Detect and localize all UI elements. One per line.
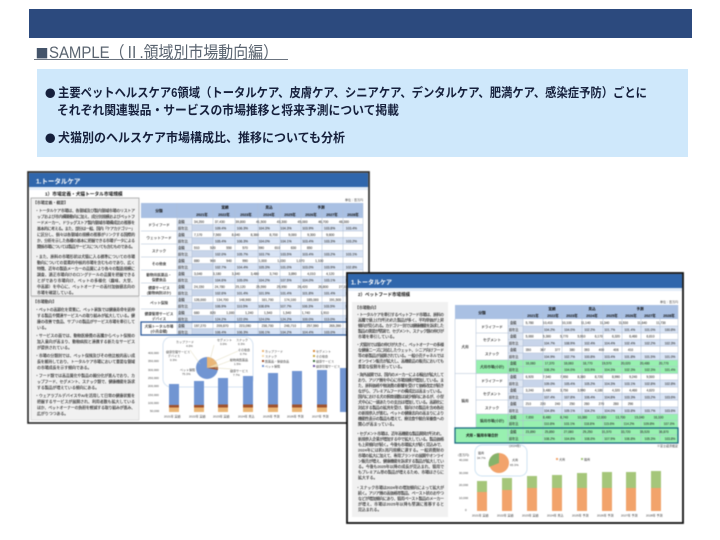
values: 金額: [178, 219, 185, 224]
text box: market trends: ン販売が増え、健康機能を訴求する製品が拡大してい: [358, 458, 444, 464]
values: 124.2% 122.0% 124.0% 124.2% 100.0% 113.0% 109.8%: [215, 318, 357, 322]
legend: スナック: [265, 354, 277, 358]
text box: market trends: 長を維持しており、トータルケア市場において重要な領域: [37, 359, 135, 364]
category labels: セグメント: [483, 337, 501, 342]
pie labels: 3.0%: [220, 342, 227, 346]
x axis labels: 2026年 予測: [287, 414, 304, 418]
pie chart: 65.3%: [510, 463, 519, 467]
pie callout: [163, 337, 253, 387]
pie chart: 猫用: [478, 450, 484, 455]
values: 前年比: [509, 354, 519, 359]
table headers: 2023年: [240, 212, 252, 217]
text box: market trends: ・トータルケアを牽引するペットフード市場は、原料の: [356, 312, 444, 317]
legend: 医薬品・保健食品: [265, 358, 289, 364]
unit note: 単位：百万円: [660, 299, 678, 304]
y axis labels: 0: [465, 508, 467, 512]
legend: その他食: [316, 354, 328, 358]
page header: [348, 274, 682, 291]
text box: market trends: [352, 302, 448, 517]
text box: market definition: ・また、原料の市場形状は犬猫に入る標準についての市場: [35, 254, 135, 259]
y axis labels: [458, 453, 469, 512]
text box: market definition: 動向についての要素的中核的市場を含むものであり、広く: [37, 260, 135, 265]
text box: market trends: オンライン販売が拡大し、高機能品の販売においても: [358, 358, 444, 364]
pie labels: 健康管理サービス: [166, 349, 190, 354]
x axis labels: 2021年 実績: [472, 512, 489, 518]
table headers: 2025年: [606, 313, 618, 318]
pie chart: (2024年): [509, 443, 521, 448]
values: 金額: [178, 245, 185, 250]
table headers: 2027年: [644, 313, 656, 318]
x axis labels: [164, 414, 329, 418]
chart: dog and cat stacked bars: [458, 443, 663, 518]
pie labels: 75.3%: [182, 372, 191, 376]
text box: market trends: 【市場動向】: [355, 305, 378, 310]
values: 前年比: [178, 238, 189, 244]
table headers: 分類: [478, 310, 486, 315]
values: 金額 350 367 377 380 393 400 406 410: [510, 347, 633, 352]
bullet: healthcare domains: ●: [45, 86, 56, 101]
legend: 犬用: [559, 456, 565, 462]
x axis labels: 2028年 予測: [646, 512, 663, 518]
bullet: healthcare domains: 犬猫別のヘルスケア市場構成比、推移についても分析: [58, 130, 345, 145]
section title: SAMPLE（Ⅱ.領域別市場動向編）: [49, 43, 278, 62]
values: 金額 210 220 240 250 260 270 280 290: [510, 401, 633, 406]
text box: market trends: 重要な役割を担っている。: [358, 364, 404, 369]
text box: market trends: ップフード、セグメント、スナック類で、健康機能を訴求: [37, 379, 135, 384]
legend: 健康サービス: [316, 358, 334, 364]
table headers: 予測: [317, 204, 325, 210]
y axis labels: 300,000: [148, 368, 159, 372]
values: 102.7% 104.4% 105.3% 101.0% 103.0% 103.9% 102.8%: [215, 266, 357, 270]
category labels: デバイス: [152, 316, 167, 321]
table headers: 2024年: [263, 212, 275, 217]
values: 前年比: [178, 316, 189, 322]
page header: 1.トータルケア: [351, 278, 392, 286]
text box: market trends: 市場の拡大に加えて、専用ブランドの展開やオンライ: [358, 453, 444, 458]
pie labels: 健康サービス: [230, 368, 248, 373]
text box: market trends: 製品の需要が堅調で、セグメント、スナック類の伸びが: [358, 328, 444, 334]
values: 104.2% 104.0% 102.2% 101.7% 101.4% 101.0% 100.8%: [544, 328, 676, 332]
header bar: [29, 9, 692, 38]
pie chart: [190, 345, 238, 379]
page subtitle: 2）ペットフード市場規模: [358, 291, 411, 298]
text box: market trends: 把握するサービスが展開され、利用者数も拡大している: [37, 399, 135, 404]
pie labels: セグメント: [217, 337, 232, 342]
x axis labels: 2025年 予測: [263, 414, 280, 418]
values: 前年比: [178, 278, 189, 282]
table headers: 実績: [548, 306, 556, 311]
y axis labels: 350,000: [148, 359, 159, 363]
pie labels: 0.7%: [240, 352, 247, 356]
x axis labels: 2023年 実績: [213, 414, 230, 418]
table headers: 2026年: [305, 212, 317, 217]
panel: sample page 1 total care market: [28, 172, 369, 423]
values: 前年比: [509, 394, 519, 400]
values: 金額: [178, 258, 185, 263]
bullet: healthcare domains: それぞれ関連製品・サービスの市場推移と将来予測について掲載: [57, 102, 399, 118]
text box: market definition: か、分析を示した各種の基本に把握できる市場データによる: [37, 238, 135, 243]
values: 金額 6,920 7,540 7,950 8,360 8,720 8,990 9,240 9,500: [510, 374, 655, 379]
text box: market trends: 加入意向が高まり、動物病院と連携する新たなサービス: [37, 339, 135, 344]
table headers: 2022年: [547, 313, 559, 318]
pie labels: 0.3%: [238, 342, 245, 346]
highlight: total row: [141, 322, 369, 335]
bars: [477, 471, 661, 511]
y axis labels: 150,000: [148, 393, 159, 397]
values: 34,200 37,430 39,800 41,500 43,300 45,000 46,700 48,300: [194, 220, 349, 224]
table headers: 2021年: [196, 212, 208, 217]
text box: market trends: ・ウェアラブルデバイスやAIを活用して日常の健康状態を: [35, 393, 135, 398]
category labels: (動物病院ほか): [147, 290, 171, 295]
x axis labels: 2026年 予測: [597, 512, 614, 518]
table headers: [478, 306, 675, 318]
text box: market trends: ・犬猫別では猫の伸びが大きく、ペットオーナーの多様: [356, 342, 444, 347]
legend: 猫用: [584, 456, 590, 462]
pie labels: 4.0%: [186, 344, 193, 348]
text box: market trends: などが増加傾向にあり、猫用ペースト製品のメーカー: [358, 496, 444, 501]
category labels: 猫用: [461, 398, 469, 403]
text box: market trends: 機能性表示の製品も増えて、療法食や総合栄養食への: [358, 416, 444, 421]
text box: market definition: ップおよび市内構築動向に加え、成分別規模およびペットフ: [37, 214, 135, 219]
values: 金額: [178, 310, 185, 315]
values: 前年比: [509, 367, 519, 372]
bullet: healthcare domains: [45, 85, 647, 146]
values: 金額 3,240 3,480 3,750 3,990 4,180 4,320 4,460 4,620: [510, 388, 655, 392]
category labels: スナック: [485, 405, 500, 410]
pie labels: スナック: [236, 337, 248, 342]
values: 金額: [178, 297, 185, 302]
values: 金額 7,650 8,480 8,740 10,380 12,000 13,700 15,040 16,100: [510, 414, 664, 420]
table headers: 2021年: [527, 313, 539, 318]
category labels: ドライフード: [481, 324, 503, 329]
text box: market definition: [31, 198, 139, 296]
bars: [169, 368, 350, 412]
text box: market trends: 新規参入企業が増加する中で拡大している。製品価格: [358, 436, 444, 442]
values: 金額: [178, 284, 185, 289]
text box: market definition: 【市場定義・概要】: [33, 200, 68, 205]
pie labels: デバイス: [168, 353, 180, 358]
table headers: 実績: [221, 204, 229, 210]
values: 102.0% 105.7% 103.7% 103.5% 103.4% 103.2% 103.1%: [215, 252, 357, 256]
values: 前年比: [509, 340, 519, 346]
x axis labels: 2022年 実績: [497, 512, 514, 518]
text box: market definition: 特徴、近年の製造メーカーの品質により各々の製造規模に: [37, 266, 135, 271]
category labels: 動物用医薬品・: [146, 272, 172, 277]
values: 104.6% 105.0% 104.2% 107.5% 104.0% 103.1% 102.7%: [215, 278, 357, 282]
category labels: 保健食品: [152, 277, 167, 282]
values: 104.8% 109.1% 104.2% 104.0% 103.8% 103.7% 103.6%: [544, 409, 676, 413]
values: 106.4% 106.3% 106.1% 104.2% 104.4% 103.0% 103.2%: [215, 330, 357, 334]
pie labels: 動物用医薬品: [230, 357, 248, 362]
category labels: ドライフード: [148, 222, 170, 227]
text box: market trends: [31, 297, 139, 420]
table headers: 2027年: [326, 212, 338, 217]
pie labels: 0.3%: [170, 358, 177, 362]
text box: market trends: の市場成長を示す傾向である。: [37, 365, 91, 370]
legend: [262, 348, 340, 368]
text box: market trends: する製品が増えている傾向にある。: [37, 385, 99, 390]
text box: market trends: な健康ニーズに対応したウェット、シニア向けフード: [358, 348, 444, 352]
text box: market definition: とがであり市場向け、ペットの多様化（趣味、大型、: [37, 278, 135, 283]
page header: 1.トータルケア: [36, 176, 81, 186]
category labels: ウェットフード: [146, 235, 172, 240]
table headers: 2023年: [566, 313, 578, 318]
values: 金額: [178, 323, 185, 328]
x axis labels: 2024年 見込: [547, 512, 564, 518]
text box: market trends: 傾向が見られる。カテゴリー別では健康機能を訴求した: [358, 323, 444, 328]
text box: market trends: ・セグメント市場は、近年高機能な製品開発が行われ、: [356, 431, 444, 436]
text box: market definition: 中高齢）を中心に、ペットオーナーの高付加価値志向の: [37, 284, 135, 289]
values: 前年比: [178, 264, 189, 270]
market size table: [141, 197, 369, 335]
unit note: 単位：百万円: [345, 197, 363, 202]
pie labels: その他食: [238, 347, 250, 352]
category labels: 犬用: [461, 344, 469, 349]
text box: market definition: に区分し、個々は各領域の規模の推移がリンクする国際的: [37, 232, 135, 237]
values: 197,270 209,870 223,090 236,700 246,710 257,590 265,390 273,980: [194, 324, 364, 328]
pie chart: 犬用: [512, 457, 518, 462]
values: 前年比: [509, 408, 519, 413]
text box: market trends: ・市場の分類別では、ペット保険及びその他比較的高い成: [35, 353, 135, 358]
pie labels: ペット保険: [180, 367, 195, 372]
text box: market trends: ・ペットの高齢化を背景に、ペット家族では健康寿命を延伸: [35, 307, 135, 312]
text box: market trends: いる。: [37, 325, 49, 330]
text box: market trends: る。今後も2025年以降の成長が見込まれ、猫用で: [358, 464, 444, 469]
table headers: 2028年: [663, 313, 675, 318]
values: 前年比: [178, 304, 189, 308]
values: 106.9% 110.5% 108.6% 107.7% 106.3% 103.5% 102.9%: [215, 304, 357, 308]
values: 108.2% 104.0% 103.9% 104.3% 102.3% 102.3% 101.4%: [544, 368, 676, 372]
legend: [556, 456, 590, 462]
category labels: スナック: [152, 248, 167, 253]
text box: market definition: 基本的に考える。また、部分は一般、国内「ケアカテゴリー」: [37, 226, 135, 231]
text box: market trends: もプレミアム帯の製品が増えるため、市場はさらに: [358, 470, 444, 474]
table headers: [155, 204, 359, 217]
text box: market definition: ・トータルケア市場は、各領域及び製内領域市場のリストア: [35, 208, 135, 213]
values: 前年比: [178, 252, 189, 256]
x axis labels: 2027年 予測: [312, 414, 329, 418]
category labels: セグメント: [483, 391, 501, 396]
category labels: 健康管理サービス: [145, 311, 174, 316]
values: 金額 16,060 17,370 18,060 18,770 19,570 20,020 20,480 20,770: [510, 360, 669, 366]
text box: market trends: おり、アジア圏を中心に市場規模が増加している。ま: [358, 378, 444, 382]
text box: market trends: 康の改善で食品、サプリの製品がサービス市場を牽引して: [37, 319, 135, 324]
values: 3,040 3,180 3,340 3,480 3,740 3,890 4,010 4,120: [194, 272, 334, 276]
values: 109.4% 106.3% 104.3% 104.3% 103.9% 103.8% 103.4%: [215, 226, 357, 230]
text box: market trends: た、原料価格や物流費の影響を受けて価格改定が続き: [358, 383, 444, 388]
pie callout: [475, 445, 527, 476]
table headers: 2026年: [625, 313, 637, 318]
values: 510 520 550 570 590 610 630 650: [194, 246, 312, 250]
text box: market trends: ・スナック市場は2024年の増加傾向によって拡大が: [356, 485, 444, 490]
category labels: [145, 222, 174, 334]
values: 前年比: [509, 436, 519, 441]
y axis labels: 50,000: [150, 409, 160, 413]
category labels: 犬猫トータル市場: [145, 324, 174, 328]
category labels: 猫用市場(小計): [480, 418, 504, 423]
values: 126,000 134,700 148,900 161,700 174,100 185,000 191,500 197,000: [194, 298, 364, 302]
text box: market trends: 関心が高まっている。: [358, 422, 397, 426]
text box: market trends: 高騰で値上げが行われた製品が多く、平均単価が上昇: [358, 318, 444, 322]
bullet: healthcare domains: ●: [45, 131, 56, 146]
text box: market trends: 見込まれる。: [358, 507, 381, 512]
page subtitle: 1）市場定義・犬猫トータル市場規模: [45, 190, 123, 198]
text box: market trends: の新規参入が進む。ペットの健康志向の高まりにより: [358, 410, 444, 416]
category labels: その他食: [152, 261, 167, 266]
x axis labels: 2022年 実績: [189, 414, 206, 418]
values: 104.7% 108.9% 102.4% 104.4% 102.4% 102.2% 102.3%: [544, 342, 676, 346]
values: 金額 5,060 5,300 5,770 5,910 6,170 6,320 6,460 6,610: [510, 334, 655, 338]
y axis labels: 400,000: [148, 351, 159, 355]
values: 110.8% 103.1% 118.8% 115.6% 114.2% 109.8% 107.0%: [544, 422, 675, 426]
panel: sample page 2 pet food market: [347, 273, 683, 523]
x axis labels: 2023年 実績: [522, 512, 539, 518]
values: 107.4% 107.8% 106.4% 104.8% 103.3% 103.2% 103.6%: [544, 396, 676, 400]
text box: market trends: が増え、市場は2025年以降も堅調に推移すると: [358, 502, 444, 506]
table headers: 見込: [265, 204, 273, 210]
pie labels: カップフード: [176, 339, 194, 344]
category labels: スナック: [485, 351, 500, 356]
pie labels: [166, 337, 250, 377]
panel: summary: [37, 69, 688, 157]
category labels: [461, 324, 504, 438]
category labels: 犬用・猫用市場合計: [466, 432, 499, 438]
text box: market trends: が提供されている。: [37, 345, 72, 350]
y axis labels: 250,000: [148, 376, 159, 380]
pie chart: 34.7%: [477, 456, 486, 460]
table headers: 2022年: [218, 212, 230, 217]
table headers: 2028年: [347, 212, 359, 217]
values: 660 820 1,000 1,240 1,540 1,540 1,740 1,910: [194, 311, 329, 315]
text box: market definition: 市場を確認している。: [37, 290, 76, 295]
legend: ペット保険: [265, 364, 280, 368]
category labels: 犬用市場(小計): [480, 364, 504, 369]
x axis labels: 2027年 予測: [621, 512, 638, 518]
values: [178, 219, 364, 334]
values: 前年比: [509, 421, 519, 426]
y axis labels: 200,000: [148, 384, 159, 388]
values: 7,170 7,560 8,040 8,360 8,700 9,000 9,300 9,600: [194, 233, 334, 237]
values: 108.2% 104.8% 108.0% 107.9% 106.8% 105.3% 103.8%: [544, 437, 676, 441]
y axis labels: 20,000: [459, 483, 469, 487]
text box: market trends: 市場を牽引している。: [358, 334, 397, 339]
pie labels: 1.5%: [234, 362, 241, 366]
y axis labels: 10,000: [459, 496, 469, 500]
pie chart: [477, 443, 521, 473]
values: 金額: [178, 271, 185, 276]
values: 109.0% 105.4% 105.2% 104.3% 103.1% 102.8% 102.8%: [544, 382, 676, 386]
table headers: 2025年: [284, 212, 296, 217]
category labels: ドライフード: [481, 378, 503, 383]
chart: stacked bars and pie: [148, 337, 350, 418]
table headers: 分類: [155, 208, 163, 213]
x axis labels: 2025年 予測: [572, 512, 589, 518]
values: 金額 5,780 10,410 10,100 11,140 11,340 11,530 11,640 11,730: [510, 320, 666, 325]
values: 前年比: [178, 330, 189, 334]
values: 前年比: [178, 226, 189, 230]
text box: market trends: 【市場動向】: [33, 299, 56, 304]
values: [509, 320, 676, 441]
text box: market trends: 国内における犬の飼育頭数は減少傾向にあるが、小型: [358, 394, 444, 399]
category labels: (小売金額): [151, 328, 167, 334]
y axis labels: 30,000: [459, 471, 469, 475]
values: 金額: [178, 232, 185, 237]
bullet: healthcare domains: 主要ペットヘルスケア6領域（トータルケア、皮膚ケア、シニアケア、デンタルケア、肥満ケア、感染症予防）ごとに: [58, 85, 647, 100]
values: 105.4% 106.3% 104.0% 104.1% 103.4% 103.3% 103.2%: [215, 240, 357, 244]
category labels: ペット保険: [150, 300, 168, 305]
x axis labels: 2024年 見込: [238, 414, 255, 418]
market size table: [455, 299, 678, 448]
values: 前年比: [509, 381, 519, 386]
values: 880 900 940 990 1,000 1,030 1,070 1,100: [194, 259, 323, 263]
text box: market definition: 関係市場については製品サービスについても含むものである。: [37, 244, 135, 249]
text box: market trends: 広がりつつある。: [37, 411, 68, 416]
category labels: 健康サービス: [148, 285, 170, 290]
text box: market definition: ードメーカー、ドラッグストア製内領域市場構成比の推移を: [37, 220, 135, 225]
y axis labels: [148, 351, 160, 413]
values: 102.6% 101.4% 101.9% 101.4% 101.8% 101.4% 101.1%: [215, 292, 357, 296]
text box: market definition: 調査、適正市場向けのロングテールの品質を把握できる: [37, 272, 135, 277]
text box: market trends: 続く。アジア圏の高価格帯製品、ペースト状のおやつ: [358, 490, 444, 496]
table headers: 予測: [636, 306, 644, 311]
y axis labels: 100,000: [148, 401, 159, 405]
text box: market trends: 等の新製品が展開されている。一般小売チャネルでは: [358, 353, 444, 358]
legend: 健康管理サービス: [316, 364, 340, 368]
text box: market trends: 2024年には約1兆円規模に達する。一般消費財の: [358, 448, 444, 452]
x axis labels: 2021年 実績: [164, 414, 181, 418]
legend: カップフード: [265, 348, 283, 354]
text box: market trends: ほか、ペットオーナーの負担を軽減する取り組みが進み、: [37, 405, 135, 410]
y axis labels: (百万円): [458, 453, 469, 457]
values: 金額 23,890 25,850 27,080 29,250 31,570 33,720 35,520 36,870: [510, 429, 669, 434]
text box: market trends: ・フード類では高品質化や製品の細分化が進んでおり、カ: [35, 373, 135, 378]
pie labels: 7.7%: [233, 373, 240, 377]
values: 24,150 24,780 25,120 25,590 25,950 26,420 26,800 27,100: [194, 285, 349, 289]
table headers: 2024年: [586, 313, 598, 318]
text box: market trends: 対応する製品の拡充を受け、猫向けの製品を含め各社: [358, 405, 444, 410]
text box: market trends: する製品や関連サービスへの取り組みが拡大している。健: [37, 313, 135, 318]
table headers: 見込: [588, 306, 596, 311]
x axis labels: [472, 512, 663, 518]
highlight: total row: [455, 428, 678, 443]
text box: market trends: ・海外展開では、国内のメーカーによる輸出が拡大して: [356, 372, 444, 377]
text box: market trends: も上昇傾向が続く。今後も市場拡大が続く見込みで、: [358, 442, 444, 447]
text box: market trends: ながら、プレミアムフードの構成比は高まっている。: [358, 388, 444, 394]
section title: ■: [36, 43, 49, 62]
y axis labels: 40,000: [459, 458, 469, 462]
page header: [29, 173, 368, 190]
values: 前年比: [509, 327, 519, 332]
legend: セグメント: [316, 348, 331, 354]
text box: market trends: 拡大する。: [358, 475, 377, 480]
text box: market trends: ・サービスの面では、動物医療費の高騰からペット保険の: [35, 333, 135, 338]
source note: ※富士経済推定: [657, 443, 678, 448]
values: 前年比: [178, 290, 189, 296]
values: 104.9% 102.7% 100.8% 103.4% 101.8% 101.5% 101.0%: [544, 355, 676, 359]
text box: market trends: 犬中心に一頭あたりの支出は増加している。高齢化に: [358, 400, 444, 404]
